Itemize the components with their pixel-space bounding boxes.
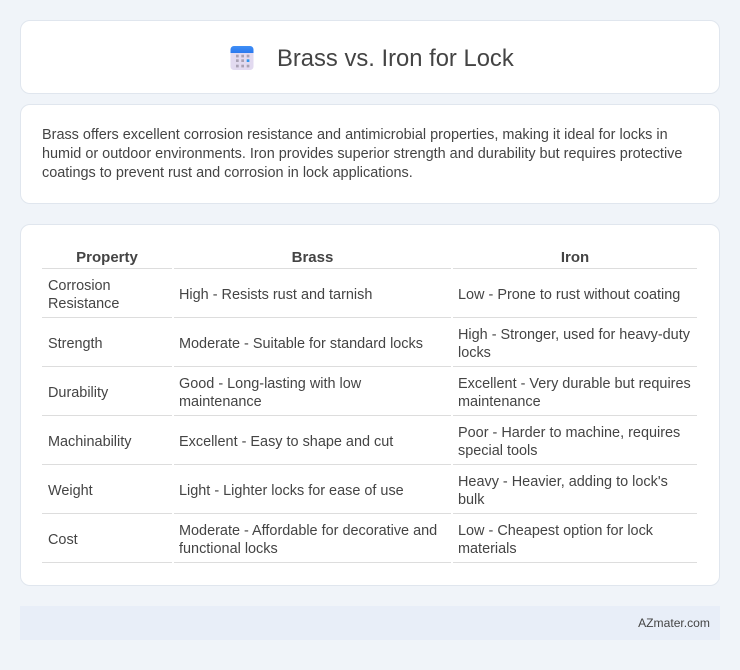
- panel: summary card: [20, 104, 720, 204]
- row: corrosion resistance: Corrosion: [48, 278, 111, 294]
- row: cost: Cost: [48, 532, 78, 548]
- row: strength: locks: [458, 345, 491, 361]
- row: strength: High - Stronger, used for heavy-duty: [458, 327, 690, 343]
- row: machinability: [42, 425, 697, 465]
- row: durability: Good - Long-lasting with low: [179, 376, 361, 392]
- row: corrosion resistance: Low - Prone to rust without coating: [458, 287, 680, 303]
- row: cost: materials: [458, 541, 517, 557]
- row: durability: [42, 376, 697, 416]
- row: machinability: special tools: [458, 443, 537, 459]
- row: weight: Weight: [48, 483, 93, 499]
- row: weight: bulk: [458, 492, 484, 508]
- row: weight: Light - Lighter locks for ease of use: [179, 483, 404, 499]
- table header: [42, 249, 697, 269]
- icon: calendar: [230, 46, 254, 70]
- row: cost: functional locks: [179, 541, 278, 557]
- row: corrosion resistance: [42, 278, 697, 318]
- footer bar: [20, 606, 720, 640]
- table header: Iron: [561, 249, 589, 266]
- row: cost: Moderate - Affordable for decorative and: [179, 523, 437, 539]
- row: durability: maintenance: [458, 394, 541, 410]
- table header: Property: [76, 249, 138, 266]
- summary text: coatings to prevent rust and corrosion in lock applications.: [42, 165, 413, 181]
- row: durability: Durability: [48, 385, 108, 401]
- row: strength: [42, 327, 697, 367]
- panel: comparison table card: [20, 224, 720, 586]
- row: weight: Heavy - Heavier, adding to lock's: [458, 474, 668, 490]
- panel: title card: [20, 20, 720, 94]
- row: cost: [42, 523, 697, 563]
- row: machinability: Poor - Harder to machine, requires: [458, 425, 680, 441]
- row: machinability: Machinability: [48, 434, 131, 450]
- row: machinability: Excellent - Easy to shape and cut: [179, 434, 393, 450]
- row: durability: Excellent - Very durable but requires: [458, 376, 691, 392]
- title: Brass vs. Iron for Lock: [277, 45, 514, 72]
- row: durability: maintenance: [179, 394, 262, 410]
- summary text: [42, 127, 682, 181]
- footer credit: AZmater.com: [638, 616, 710, 630]
- summary text: humid or outdoor environments. Iron provides superior strength and durability but requires protective: [42, 146, 682, 162]
- row: strength: Strength: [48, 336, 103, 352]
- summary text: Brass offers excellent corrosion resistance and antimicrobial properties, making it ideal for locks in: [42, 127, 668, 143]
- row: corrosion resistance: High - Resists rust and tarnish: [179, 287, 372, 303]
- row: cost: Low - Cheapest option for lock: [458, 523, 653, 539]
- row: corrosion resistance: Resistance: [48, 296, 119, 312]
- table header: Brass: [292, 249, 333, 266]
- row: weight: [42, 474, 697, 514]
- row: strength: Moderate - Suitable for standard locks: [179, 336, 423, 352]
